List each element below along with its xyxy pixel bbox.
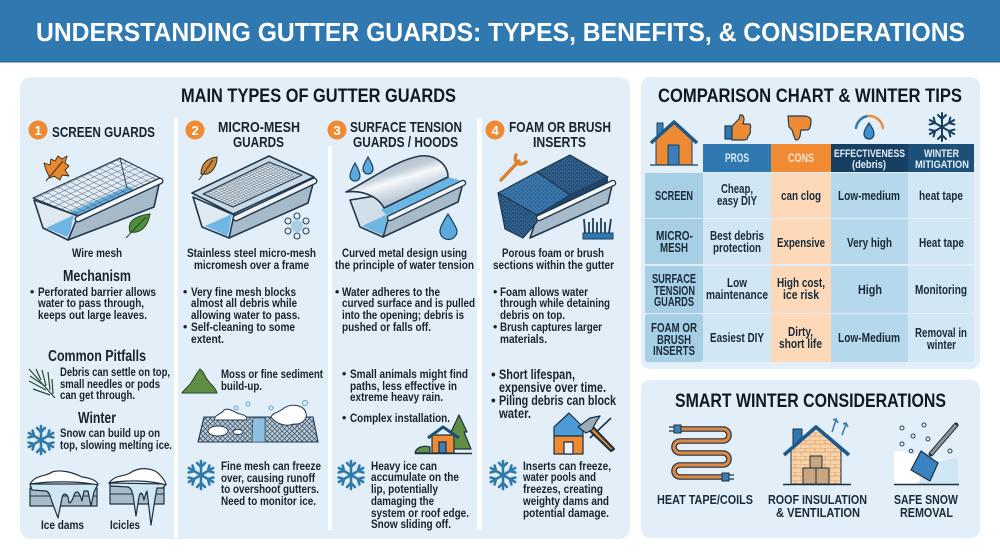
icon: moss mound (182, 369, 217, 393)
panel: smart winter considerations (641, 380, 980, 538)
table header labels: MITIGATION (915, 159, 969, 171)
text: screen mechanism: Perforated barrier allows (38, 285, 156, 299)
table row: screen (655, 182, 963, 208)
subtitle: porous foam (493, 246, 614, 272)
subtitle: stainless steel: Stainless steel micro-mesh (187, 246, 316, 260)
heading: mechanism: Mechanism (63, 268, 131, 285)
text: screen winter (60, 426, 172, 452)
table header labels (725, 148, 969, 171)
column: screen guards (27, 120, 172, 532)
text: surface tension winter: Heavy ice can (371, 459, 437, 473)
table header labels: (debris) (852, 159, 886, 171)
icon: snow on mesh (198, 400, 318, 442)
text: screen pitfalls: Debris can settle on top, (60, 365, 170, 379)
text: micro-mesh mechanism: • (183, 285, 187, 299)
heading: comparison chart: COMPARISON CHART & WINTER TIPS (658, 86, 962, 107)
table header labels: WINTER (924, 148, 959, 160)
table row: surface tension guards: High (858, 283, 882, 297)
text: foam winter (522, 459, 611, 520)
subtitle: curved metal: the principle of water tension (335, 258, 474, 272)
icon: snowflake (337, 461, 365, 489)
table row: foam or brush inserts (651, 321, 967, 358)
heading: surface tension guards (350, 120, 462, 151)
text: micro-mesh mechanism: • (183, 320, 187, 334)
heading: surface tension guards: GUARDS / HOODS (353, 135, 458, 151)
heading: micro-mesh guards: MICRO-MESH (218, 120, 300, 136)
label: ice dams: Ice dams (41, 518, 84, 532)
heading: screen guards: SCREEN GUARDS (52, 125, 155, 141)
text: micro-mesh mechanism: Very fine mesh blocks (191, 285, 296, 299)
text: foam pitfalls: expensive over time. (499, 380, 606, 395)
badge 3 (328, 120, 346, 140)
table row: foam or brush inserts: winter (926, 338, 956, 352)
text: surface tension winter: system or roof edge. (371, 506, 469, 520)
icon: foam gutter (498, 155, 613, 238)
column: micro-mesh guards (182, 120, 323, 508)
text: surface tension mechanism: • (335, 285, 339, 299)
icon: ice dams (30, 471, 98, 518)
heading: smart winter considerations: SMART WINTER CONSIDERATIONS (675, 391, 946, 412)
icon: house and tree (415, 415, 472, 454)
text: foam mechanism: materials. (500, 332, 547, 346)
badge 2 (186, 120, 204, 140)
text: foam mechanism: Brush captures larger (500, 320, 602, 334)
text: micro-mesh winter: over, causing runoff (221, 471, 316, 485)
table row: screen: Low-medium (838, 189, 900, 203)
table row: micro-mesh: Expensive (777, 236, 825, 250)
badge 4: 4 (492, 123, 500, 138)
text: foam mechanism (493, 285, 610, 346)
panel: comparison chart and winter tips (641, 77, 980, 369)
icon: micro-mesh gutter (192, 156, 314, 238)
icon: fine particles (285, 213, 309, 239)
heading: micro-mesh guards: GUARDS (233, 135, 284, 151)
table header labels: PROS (725, 153, 749, 165)
icon: snowflake (489, 461, 517, 489)
subtitle: stainless steel: micromesh over a frame (194, 258, 309, 272)
text: micro-mesh pitfalls: build-up. (221, 379, 262, 393)
text: surface tension winter: Snow sliding off. (371, 517, 451, 531)
text: surface tension pitfalls (342, 367, 468, 425)
text: surface tension mechanism: into the opening; debris is (342, 308, 464, 322)
table row: screen: heat tape (919, 189, 963, 203)
text: surface tension pitfalls: Small animals might find (350, 367, 468, 381)
heading: winter: Winter (78, 410, 116, 427)
text: foam winter: Inserts can freeze, (523, 459, 611, 473)
table row: micro-mesh: Best debris (710, 229, 764, 243)
icon: green leaf (126, 214, 150, 238)
table row: surface tension guards: ice risk (783, 288, 819, 302)
text: screen mechanism: • (30, 285, 34, 299)
text: micro-mesh mechanism: Self-cleaning to some (191, 320, 295, 334)
table row: surface tension guards: SURFACE (652, 272, 696, 286)
icon: house (650, 122, 698, 165)
label: heat tape: HEAT TAPE/COILS (657, 493, 753, 507)
label: safe snow removal: SAFE SNOW (894, 493, 958, 507)
table row: foam or brush inserts: Low-Medium (838, 331, 900, 345)
table row: screen: Cheap, (721, 182, 753, 196)
icon: snowflake (27, 426, 55, 454)
icon: thumbs down (788, 116, 811, 140)
text: surface tension pitfalls: Complex installation. (350, 411, 450, 425)
badge 2: 2 (192, 123, 199, 138)
text: micro-mesh winter (221, 459, 321, 508)
text: foam winter: potential damage. (523, 506, 609, 520)
text: surface tension pitfalls: • (342, 411, 346, 425)
heading: surface tension guards: SURFACE TENSION (350, 120, 462, 136)
heading: micro-mesh guards (218, 120, 300, 151)
text: foam mechanism: • (493, 320, 497, 334)
subtitle: curved metal: Curved metal design using (342, 246, 467, 260)
text: micro-mesh mechanism (183, 285, 300, 346)
icon: insulated house (783, 419, 851, 484)
icon: maple leaf (44, 156, 69, 181)
text: foam mechanism: through while detaining (500, 296, 610, 310)
icon: wrench (501, 155, 526, 180)
column: foam or brush inserts (486, 120, 616, 520)
icon: brown leaf (199, 157, 217, 180)
text: foam mechanism: debris on top. (500, 308, 565, 322)
badge 1: 1 (34, 123, 42, 138)
icon: pine branch (29, 369, 55, 398)
text: surface tension winter: damaging the (371, 494, 434, 508)
text: foam pitfalls: • (491, 393, 496, 408)
text: screen winter: Snow can build up on (60, 426, 160, 440)
icon: surface tension gutter (346, 156, 463, 237)
text: screen winter: top, slowing melting ice. (60, 438, 172, 452)
text: foam pitfalls: water. (498, 406, 531, 421)
label: roof insulation: & VENTILATION (776, 506, 860, 520)
panel: main types of gutter guards (20, 77, 630, 539)
table row: surface tension guards: TENSION (654, 284, 695, 298)
text: micro-mesh pitfalls (221, 367, 323, 393)
text: micro-mesh winter: Fine mesh can freeze (221, 459, 321, 473)
icon: water drops (350, 157, 457, 240)
text: micro-mesh mechanism: allowing water to pass. (191, 308, 300, 322)
icon: brush (583, 218, 613, 239)
text: foam pitfalls (491, 367, 616, 421)
label: icicles: Icicles (110, 518, 140, 532)
text: screen pitfalls: small needles or pods (60, 377, 160, 391)
badge 1 (28, 120, 48, 140)
text: foam mechanism: Foam allows water (500, 285, 588, 299)
text: surface tension mechanism: curved surface and is pulled (342, 296, 475, 310)
label: safe snow removal (894, 493, 958, 520)
table header labels: EFFECTIVENESS (834, 148, 905, 160)
table row: foam or brush inserts: Dirty, (788, 325, 813, 339)
table row: foam or brush inserts: Easiest DIY (710, 331, 765, 345)
icon: heat tape coil (669, 425, 734, 481)
text: micro-mesh mechanism: extent. (191, 332, 224, 346)
subtitle: stainless steel (187, 246, 316, 272)
comparison table (645, 144, 974, 362)
text: surface tension winter: lip, potentially (371, 482, 438, 496)
text: screen pitfalls (60, 365, 170, 402)
table row: surface tension guards: Low (727, 276, 747, 290)
text: surface tension pitfalls: extreme heavy rain. (350, 390, 443, 404)
text: screen mechanism: keeps out large leaves. (38, 308, 147, 322)
text: foam pitfalls: Piling debris can block (499, 393, 616, 408)
column: surface tension guards (328, 120, 475, 531)
table row: micro-mesh: Very high (847, 236, 892, 250)
text: foam mechanism: • (493, 285, 497, 299)
title banner: UNDERSTANDING GUTTER GUARDS: TYPES, BENEFITS, & CONSIDERATIONS (36, 17, 965, 47)
icon: snow removal broom (894, 423, 959, 484)
text: surface tension mechanism: Water adheres to the (342, 285, 440, 299)
table row: micro-mesh: protection (713, 241, 761, 255)
heading: foam or brush inserts: FOAM OR BRUSH (509, 120, 611, 136)
icon: screen gutter (33, 158, 160, 240)
subtitle: porous foam: Porous foam or brush (502, 246, 604, 260)
icon: thumbs up (725, 115, 751, 140)
icon: icicles (109, 469, 166, 525)
heading: foam or brush inserts (509, 120, 611, 151)
table row: micro-mesh (656, 229, 964, 255)
table header labels: CONS (788, 153, 814, 165)
table row: foam or brush inserts: short life (779, 337, 822, 351)
table row: foam or brush inserts: Removal in (915, 326, 967, 340)
badge 4 (486, 120, 504, 140)
icon: effectiveness gauge (856, 116, 883, 139)
text: micro-mesh winter: to overshoot gutters. (221, 482, 319, 496)
text: surface tension winter: accumulate on the (371, 470, 459, 484)
heading: common pitfalls: Common Pitfalls (48, 348, 146, 365)
text: surface tension pitfalls: paths, less effective in (350, 379, 457, 393)
table row: screen: can clog (781, 189, 821, 203)
text: micro-mesh mechanism: almost all debris while (191, 296, 297, 310)
text: foam winter: freezes, creating (523, 482, 603, 496)
text: micro-mesh winter: Need to monitor ice. (221, 494, 316, 508)
text: surface tension mechanism (335, 285, 475, 334)
text: surface tension mechanism: pushed or falls off. (342, 320, 431, 334)
icon: house and hammer (554, 413, 614, 454)
icon: snowflake (928, 113, 956, 141)
heading: main types: MAIN TYPES OF GUTTER GUARDS (181, 86, 456, 107)
label: roof insulation: ROOF INSULATION (768, 493, 867, 507)
text: screen pitfalls: can get through. (60, 388, 135, 402)
text: foam winter: weighty dams and (522, 494, 609, 508)
table row: micro-mesh: MICRO- (656, 229, 693, 243)
text: screen mechanism: water to pass through, (37, 296, 144, 310)
table row: micro-mesh: Heat tape (919, 236, 964, 250)
table row: foam or brush inserts: BRUSH (657, 333, 691, 347)
table row: surface tension guards: Monitoring (915, 283, 967, 297)
table row: surface tension guards: maintenance (706, 288, 768, 302)
text: surface tension winter (371, 459, 469, 531)
text: micro-mesh pitfalls: Moss or fine sediment (221, 367, 323, 381)
subtitle: porous foam: sections within the gutter (493, 258, 614, 272)
icon: snowflake (187, 461, 215, 489)
text: foam pitfalls: • (491, 367, 496, 382)
subtitle: wire mesh: Wire mesh (72, 246, 122, 260)
text: foam pitfalls: Short lifespan, (499, 367, 575, 382)
label: safe snow removal: REMOVAL (900, 506, 953, 520)
label: roof insulation (768, 493, 867, 520)
text: foam winter: water pools and (522, 470, 596, 484)
text: screen mechanism (30, 285, 156, 322)
heading: foam or brush inserts: INSERTS (533, 135, 586, 151)
table row: surface tension guards: High cost, (777, 276, 825, 290)
table row: surface tension guards: GUARDS (654, 295, 694, 309)
table row: micro-mesh: MESH (660, 241, 688, 255)
table row: foam or brush inserts: FOAM OR (651, 321, 697, 335)
title banner (0, 0, 1000, 62)
table row: foam or brush inserts: INSERTS (653, 344, 695, 358)
badge 3: 3 (334, 123, 341, 138)
subtitle: curved metal (335, 246, 474, 272)
table row: screen: easy DIY (717, 194, 758, 208)
table row: screen: SCREEN (655, 189, 693, 203)
table row: surface tension guards (652, 272, 967, 309)
text: surface tension pitfalls: • (342, 367, 346, 381)
